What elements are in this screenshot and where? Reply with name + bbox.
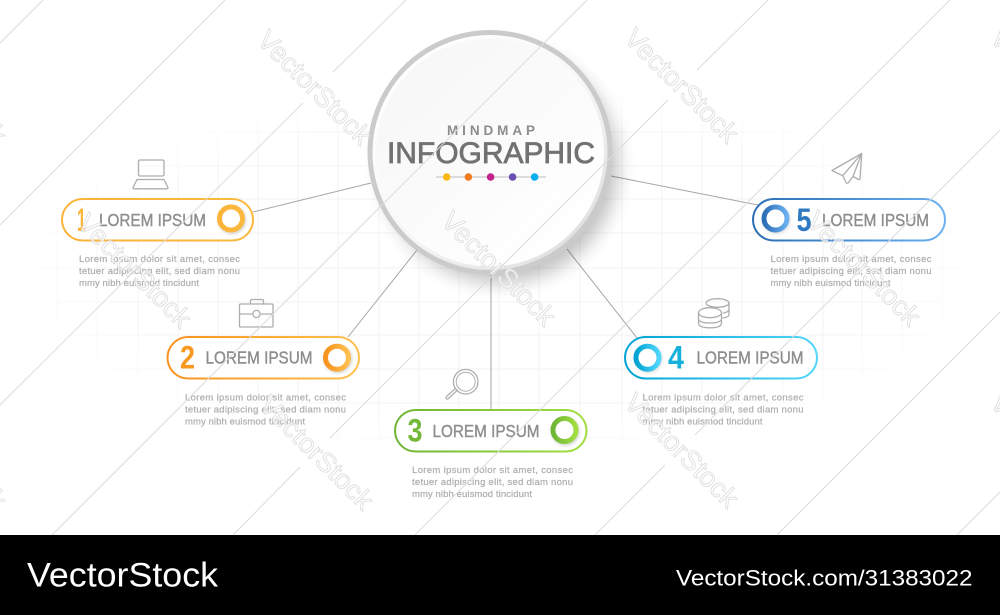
icon: paper plane	[832, 154, 862, 183]
watermark text: VectorStock	[618, 23, 745, 149]
pill 1: LOREM IPSUM	[99, 210, 206, 230]
text block 1: Lorem ipsum dolor sit amet, consec	[79, 254, 240, 265]
text block 2	[185, 393, 346, 428]
footer logo: VectorStock	[27, 556, 219, 594]
pill 5: 5	[796, 202, 812, 238]
pill 2: LOREM IPSUM	[206, 348, 312, 368]
pill 1: 1	[77, 202, 86, 238]
watermark text: VectorStock	[71, 208, 198, 334]
text block 4: tetuer adipiscing elit, sed diam nonu	[642, 405, 804, 416]
icon: laptop	[133, 160, 168, 189]
panel: item 2	[168, 300, 359, 428]
text block 3: Lorem ipsum dolor sit amet, consec	[412, 465, 573, 476]
text block 3: mmy nibh euismod tincidunt	[412, 489, 532, 500]
pill 3	[395, 410, 586, 452]
pill 4: LOREM IPSUM	[696, 348, 804, 368]
panel: item 3	[395, 369, 586, 500]
icon: coins	[698, 299, 729, 328]
background grid	[102, 122, 899, 418]
connector lines	[253, 176, 758, 409]
text block 1: tetuer adipiscing elit, sed diam nonu	[79, 266, 240, 277]
heading: mindmap: MINDMAP	[447, 123, 535, 138]
icon: magnifier	[446, 369, 478, 399]
watermark text: VectorStock	[251, 25, 378, 151]
watermark text: VectorStock	[435, 206, 562, 332]
watermark text: VectorStock	[800, 206, 927, 332]
pill 1	[62, 199, 253, 240]
pill 3: LOREM IPSUM	[432, 421, 540, 441]
text block 3: tetuer adipiscing elit, sed diam nonu	[412, 477, 573, 488]
pill 5: LOREM IPSUM	[822, 210, 929, 230]
pill 3: 3	[408, 412, 422, 448]
pill 2: 2	[180, 340, 195, 376]
pill 4	[625, 337, 817, 378]
text block 4: Lorem ipsum dolor sit amet, consec	[642, 393, 804, 404]
text block 2: mmy nibh euismod tincidunt	[185, 417, 305, 428]
text block 2: Lorem ipsum dolor sit amet, consec	[185, 393, 346, 404]
text block 2: tetuer adipiscing elit, sed diam nonu	[185, 405, 346, 416]
text block 1: mmy nibh euismod tincidunt	[79, 278, 199, 289]
text block 4: mmy nibh euismod tincidunt	[642, 417, 763, 428]
text block 5: Lorem ipsum dolor sit amet, consec	[770, 254, 932, 265]
watermark text: VectorStock	[253, 390, 380, 516]
text block 5: tetuer adipiscing elit, sed diam nonu	[770, 266, 932, 277]
heading: infographic: INFOGRAPHIC	[387, 137, 595, 170]
text block 5: mmy nibh euismod tincidunt	[770, 278, 891, 289]
pill 2	[168, 337, 359, 378]
footer image id: VectorStock.com/31383022	[676, 566, 972, 590]
text block 5	[770, 254, 932, 289]
text block 4	[642, 393, 804, 428]
pill 4: 4	[668, 340, 684, 376]
panel: item 5	[753, 154, 945, 289]
panel: item 1	[62, 160, 253, 289]
panel: item 4	[625, 299, 817, 428]
watermark text: VectorStock	[618, 388, 745, 514]
text block 3	[412, 465, 573, 500]
five dot strip	[436, 173, 546, 181]
icon: briefcase	[240, 300, 273, 327]
central circle	[368, 30, 618, 283]
text block 1	[79, 254, 240, 289]
footer bar	[0, 535, 1000, 615]
pill 5	[753, 199, 945, 240]
